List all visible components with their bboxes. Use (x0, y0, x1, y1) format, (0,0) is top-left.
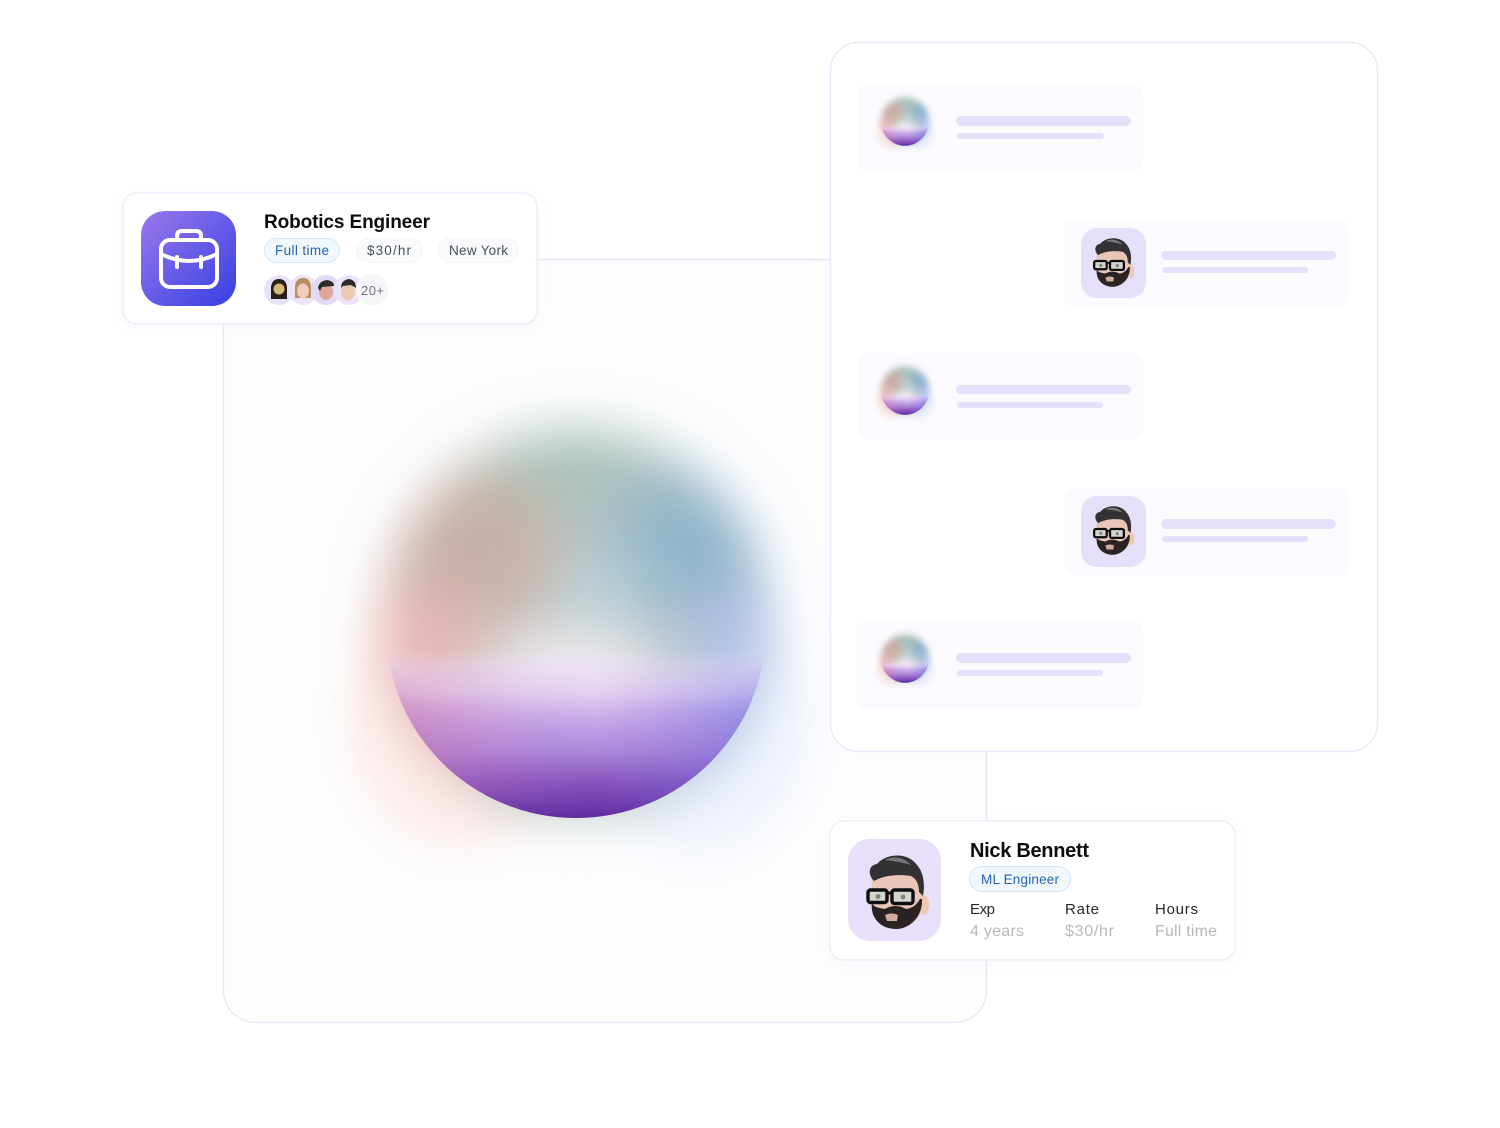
chat bubble 2: user (1064, 220, 1349, 307)
panel: chat window (830, 42, 1378, 752)
stat: hours: Full time (1155, 923, 1217, 940)
message lines (956, 116, 1131, 139)
tag: location: New York (449, 243, 508, 258)
tag: Full time: Full time (275, 243, 329, 258)
connector: job card to chat (538, 258, 830, 260)
icon: small orb (869, 626, 941, 692)
stat: hours (1155, 901, 1217, 940)
icon: small orb (869, 89, 941, 155)
stat: rate (1065, 901, 1115, 940)
chat bubble 5: assistant (856, 621, 1143, 709)
candidate name: Nick Bennett (970, 840, 1089, 862)
card: candidate profile (830, 821, 1235, 960)
message lines (956, 653, 1131, 676)
panel: large background frame (224, 260, 986, 1022)
stat: hours: Hours (1155, 901, 1198, 918)
stat: experience: Exp (970, 901, 995, 918)
connector: chat to profile (986, 752, 988, 821)
icon: briefcase (141, 211, 236, 306)
avatar: Nick small (1081, 228, 1146, 298)
tag: location (438, 238, 518, 262)
tag: role: ML Engineer (981, 872, 1060, 887)
card: job posting (123, 193, 537, 324)
applicant avatars (264, 274, 388, 306)
tag: role (970, 866, 1070, 892)
more applicants count: 20+ (361, 283, 384, 298)
message lines (1161, 251, 1336, 273)
message lines (1161, 519, 1336, 542)
icon: small orb (869, 358, 941, 424)
chat bubble 3: assistant (858, 353, 1143, 440)
stat: experience (970, 901, 1024, 940)
avatar: Nick Bennett (848, 839, 941, 941)
stat: rate: Rate (1065, 901, 1099, 918)
tag: rate (356, 238, 422, 262)
avatar: Nick small (1081, 496, 1146, 567)
chat bubble 1: assistant (858, 84, 1143, 172)
message lines (956, 385, 1131, 408)
chat bubble 4: user (1064, 488, 1349, 575)
gradient orb (291, 363, 861, 893)
tag: rate: $30/hr (367, 243, 412, 258)
job title: Robotics Engineer (264, 212, 431, 233)
tag: Full time (264, 238, 340, 262)
stat: experience: 4 years (970, 923, 1024, 940)
stat: rate: $30/hr (1065, 923, 1115, 940)
